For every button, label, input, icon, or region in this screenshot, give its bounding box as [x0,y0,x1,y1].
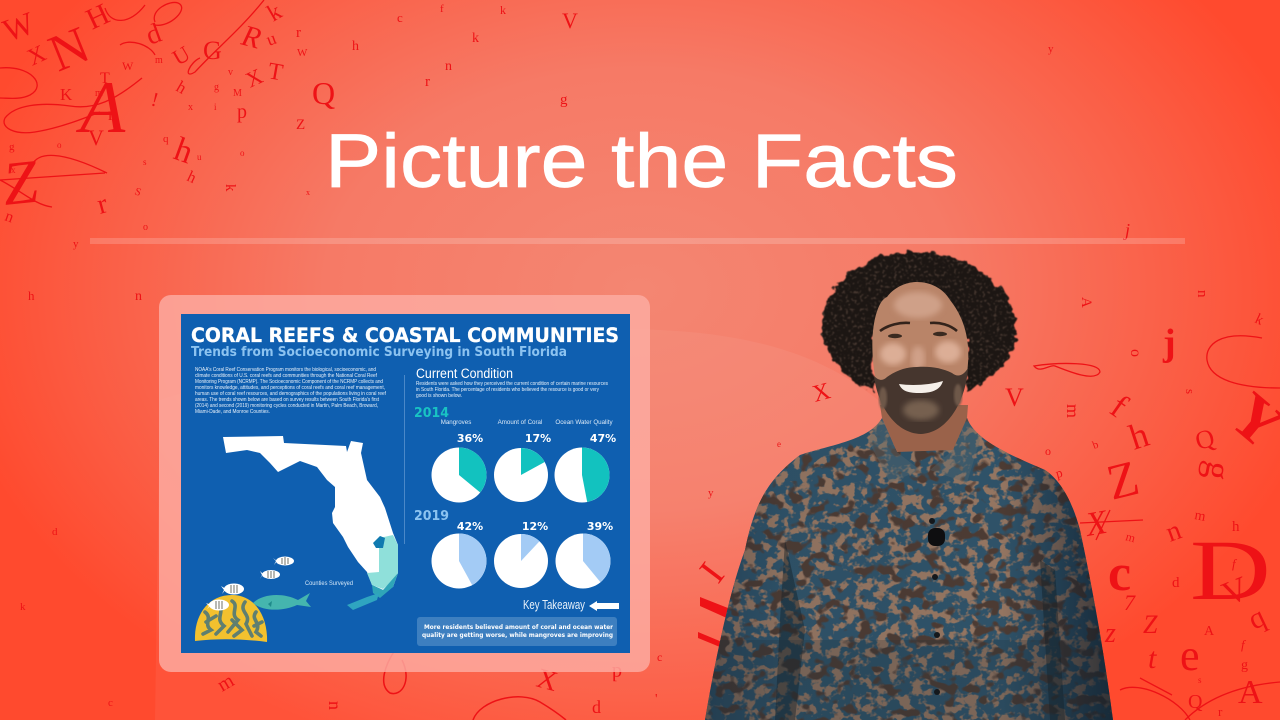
scattered letters background: h [1232,519,1240,535]
scattered letters background: n [445,59,452,74]
pie column labels [441,419,614,426]
scattered letters background: e [1180,631,1200,680]
intro paragraph: Monitoring Program (NCRMP). The Socioeconomic Component of the NCRMP collects and [195,379,383,385]
map label: Counties Surveyed [305,580,353,587]
scattered letters background: r [425,74,430,90]
intro paragraph: areas. The trends shown below are based on survey results between South Florida's first [195,397,379,403]
scattered letters background: Z [296,117,305,133]
scattered letters background: 7 [1124,590,1136,615]
presenter shirt [700,410,1120,720]
scattered letters background: G [203,36,222,65]
scattered letters background: m [95,88,103,99]
scattered letters background: n [1162,515,1186,549]
infographic blue sheet [181,314,630,653]
scattered letters background: A [1238,674,1263,711]
intro paragraph: Miami-Dade, and Monroe Counties. [195,409,270,415]
scattered letters background: o [240,148,245,158]
section heading: current condition: in South Florida. The percentage of residents who believed the resource is good or very [416,387,599,393]
scattered letters background: b [1091,438,1101,452]
scattered letters background: ! [149,89,161,112]
intro paragraph: NOAA's Coral Reef Conservation Program monitors the biological, socioeconomic, and [195,367,376,373]
scattered letters background: X [533,663,561,698]
scattered letters background: o [1045,444,1051,458]
panel: infographic frame [159,295,650,672]
pie column labels: Mangroves [441,419,471,426]
infographic heading [191,324,619,360]
pie column labels: Ocean Water Quality [555,419,614,426]
callout: key takeaway [417,617,617,646]
scattered letters background: Z [1143,610,1158,639]
scattered letters background: f [440,3,444,15]
pie chart: 2019 mangroves 42%: 42% [457,520,483,533]
scattered letters background: n [1194,290,1210,298]
scattered letters background: A [75,67,126,149]
scattered letters background: m [1193,508,1207,525]
scattered letters background: A [1078,297,1094,308]
scattered letters background: e [777,439,781,449]
scattered letters background: I [692,555,733,590]
scattered letters background: U [168,41,194,70]
background wave [155,329,1000,720]
presenter beard [874,367,968,434]
scattered letters background: n [135,289,142,304]
pie chart: 2019 coral 12%: 12% [522,520,548,533]
scattered letters background: q [1243,600,1271,636]
scattered letters background: p [1054,465,1064,481]
illustration: parrotfish [253,593,311,610]
scattered letters background: d [592,697,601,717]
pie column labels: Amount of Coral [498,419,542,426]
pie chart: 2019 water 39%: 39% [587,520,613,533]
scattered letters background: x [306,188,310,197]
section heading: current condition [416,366,608,399]
scattered letters background: y [1048,43,1054,55]
scattered letters background: Q [312,75,335,111]
illustration: brain coral [195,595,267,642]
scattered letters background: c [108,697,113,709]
scattered letters background: s [1183,389,1198,394]
scattered letters background: p [237,101,247,123]
scattered letters background: n [3,208,16,226]
scattered letters background: x [188,102,193,113]
scattered letters background: M [233,88,242,99]
scattered letters background: u [197,152,202,162]
year label 2019: 2019 [414,509,449,524]
intro paragraph: (2014) and second (2019) monitoring cycles conducted in Martin, Palm Beach, Broward, [195,403,378,409]
scattered letters background: k [20,601,26,613]
scattered letters background: Z [1101,449,1144,511]
section heading: current condition: Current Condition [416,366,513,381]
scattered letters background: S [133,186,143,199]
scattered letters background: Z [0,148,41,219]
scattered letters background: k [472,31,479,46]
scattered letters background: o [57,140,62,150]
callout: key takeaway: More residents believed amount of coral and ocean water [424,624,614,631]
presenter hair [822,252,1016,392]
scattered letters background: D [1190,522,1271,618]
intro paragraph: human use of coral reef resources, and demographics of the populations living in coral reef [195,391,386,397]
scattered letters background: g [1241,658,1248,673]
scattered letters background: k [1252,311,1266,329]
scattered letters background: Q [1188,691,1203,713]
scattered letters background: V [1217,570,1254,613]
column divider [404,375,405,544]
scattered letters background: h [1124,414,1154,458]
scattered letters background: g [1197,459,1240,483]
scattered letters background: j [1123,220,1130,240]
scattered letters background: r [1218,704,1223,719]
scattered letters background: m [155,55,163,66]
presenter buttons [929,518,940,695]
presenter [700,252,1120,720]
presenter eyes and brows [880,323,957,331]
pie chart: 2019 mangroves 42% [432,520,486,588]
scattered letters background: h [173,77,190,98]
presenter neck [880,405,968,452]
scattered letters background: h [28,288,35,303]
scattered letters background: x [11,165,16,175]
pie chart: 2014 mangroves 36%: 36% [457,432,483,445]
scattered letters background: W [297,47,308,59]
pie chart: 2014 coral 17%: 17% [525,432,551,445]
pie chart: 2014 water 47% [554,432,616,502]
scattered letters background: h [352,39,359,54]
scattered letters background: X [810,378,833,408]
scattered letters background: V [562,8,578,33]
scattered letters background: m [1124,529,1138,545]
scattered letters background: s [143,157,147,167]
scattered letters background: n [108,104,117,124]
scattered letters background: V [88,125,104,150]
scattered letters background: A [1204,624,1215,639]
pie chart: 2019 water 39% [556,520,613,588]
section heading: current condition: Residents were asked how they perceived the current condition of certain marine resources [416,381,608,387]
title underline [90,238,1185,244]
section heading: current condition: good is shown below. [416,393,462,399]
scattered letters background: T [100,70,110,87]
scattered letters background: X [242,63,267,93]
scattered letters background: r [94,188,111,221]
intro paragraph: monitors knowledge, attitudes, and perceptions of coral reefs and coral reef management, [195,385,385,391]
infographic heading: CORAL REEFS & COASTAL COMMUNITIES [191,324,619,347]
scattered letters background: y [708,487,714,499]
scattered letters background: X [1081,504,1111,544]
year label 2014: 2014 [414,406,449,421]
title: Picture the Facts [325,119,958,204]
scattered letters background: i [214,102,217,112]
scattered letters background: V [1005,383,1024,412]
scattered letters background: T [266,58,285,87]
intro paragraph [195,367,386,415]
presenter smile [899,381,943,393]
scattered letters background: c [1108,545,1131,602]
scattered letters background: f [1103,388,1134,425]
presenter face [872,282,968,434]
map: Florida [223,436,398,610]
pie chart: 2014 coral 17% [494,432,551,502]
scattered letters background: W [122,59,134,73]
scattered letters background: z [1104,618,1116,649]
pie chart: 2014 water 47%: 47% [590,432,616,445]
scattered letters background: s [1198,675,1202,685]
scattered letters background: g [214,82,219,93]
scattered letters background: m [1063,404,1083,418]
scattered letters background: d [52,526,58,538]
scattered letters background: X [24,41,50,71]
scattered letters background: m [214,669,238,696]
scattered letters background: y [73,238,79,250]
scattered letters background: c [657,650,662,664]
scattered letters background: ' [655,692,658,707]
scattered letters background: f [1232,556,1238,571]
scattered letters background: j [1162,322,1176,364]
scattered letters background: d [142,18,166,52]
scattered letters background: r [296,25,301,41]
scattered letters background: K [60,85,73,104]
intro paragraph: climate conditions of U.S. coral reefs and communities through the National Coral Reef [195,373,377,379]
scattered letters background: h [169,131,198,171]
scattered letters background: f [1241,637,1247,652]
scattered letters background: k [222,184,238,192]
scattered letters background: u [264,28,279,50]
scattered letters background: o [143,222,148,233]
arrow: key takeaway [589,601,619,611]
presenter lapel microphone [928,528,945,546]
scattered letters background: h [184,168,199,187]
scattered letters background: d [1172,575,1180,591]
scattered letters background: N [41,16,97,83]
scattered letters background: o [1127,349,1144,357]
scattered letters background: v [228,67,233,78]
illustration: striped fish [206,556,294,610]
callout: key takeaway: quality are getting worse, while mangroves are improving [422,632,613,639]
pie chart: 2019 coral 12% [494,520,548,588]
scattered letters background: q [163,133,169,145]
key takeaway label: Key Takeaway [523,598,586,612]
scattered letters background: t [1148,642,1157,675]
scattered letters background: d [612,662,622,684]
scattered letters background: k [500,3,506,17]
infographic heading: Trends from Socioeconomic Surveying in South Florida [191,345,567,360]
pie chart: 2014 mangroves 36% [432,432,486,502]
scattered letters background: n [325,701,345,710]
scattered letters background: c [397,10,403,25]
scattered letters background: Q [1192,423,1218,456]
scattered letters background: g [9,141,15,153]
scattered letters background: R [237,19,264,56]
scattered letters background: g [560,92,568,108]
